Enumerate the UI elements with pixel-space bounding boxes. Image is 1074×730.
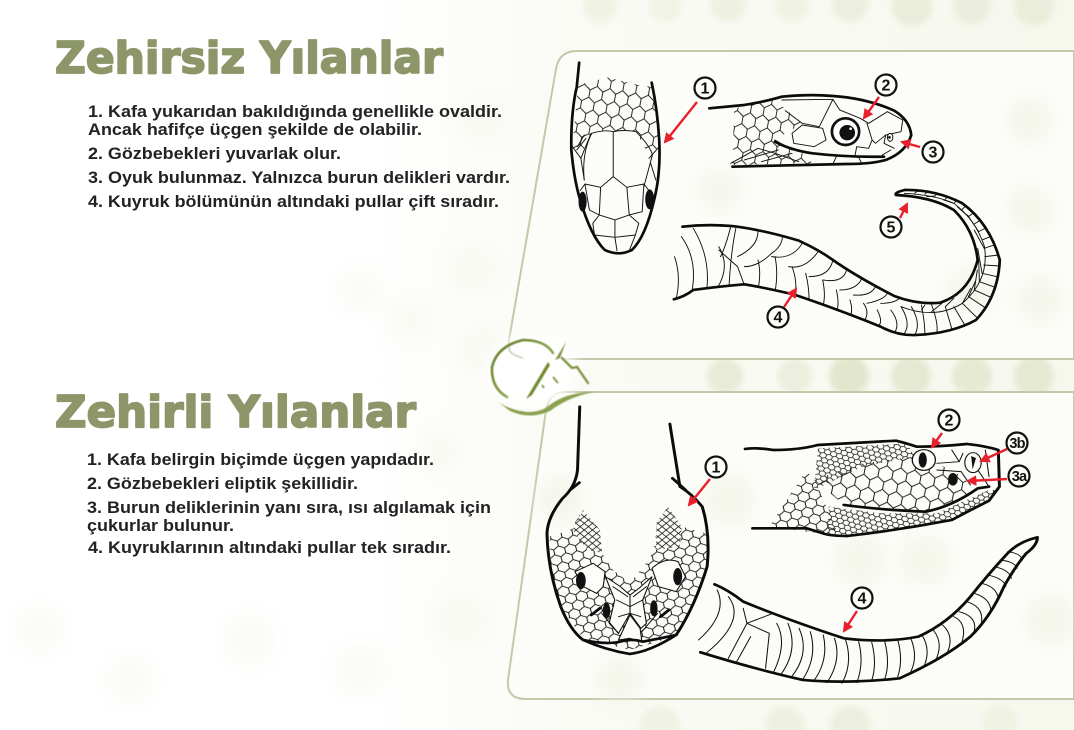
number badges: non-venomous: 3 [929, 144, 938, 162]
illustration: non-venomous tail [674, 189, 1000, 335]
number badges: venomous [706, 410, 1030, 608]
illustration: venomous head top view [547, 407, 708, 654]
title: venomous snakes: Zehirli Yılanlar [55, 387, 416, 438]
panel: non-venomous [509, 51, 1074, 359]
number badges: non-venomous: 1 [701, 80, 710, 98]
illustration: non-venomous head top view [571, 63, 660, 253]
arrows: venomous [689, 433, 1007, 631]
number badges: non-venomous: 4 [774, 310, 783, 326]
number badges: venomous: 3b [1009, 436, 1026, 452]
panel texture [536, 96, 1074, 704]
text block: non-venomous traits: 4. Kuyruk bölümünün altındaki pullar çift sıradır. [88, 192, 499, 211]
number badges: venomous: 4 [858, 590, 867, 608]
text block: venomous traits: 2. Gözbebekleri eliptik şekillidir. [87, 474, 358, 493]
logo backing glow [484, 336, 576, 408]
text block: venomous traits: çukurlar bulunur. [87, 516, 234, 535]
logo [492, 340, 595, 416]
text block: venomous traits: 4. Kuyruklarının altındaki pullar tek sıradır. [88, 538, 451, 557]
text block: non-venomous traits: 1. Kafa yukarıdan bakıldığında genellikle ovaldir. [88, 102, 502, 121]
panel: venomous [508, 392, 1074, 699]
number badges: venomous: 2 [945, 412, 954, 430]
arrows: non-venomous [665, 97, 920, 307]
text block: non-venomous traits [88, 102, 510, 211]
text block: venomous traits [87, 450, 491, 557]
number badges: non-venomous: 2 [882, 78, 891, 94]
text block: non-venomous traits: Ancak hafifçe üçgen şekilde de olabilir. [88, 120, 422, 139]
text block: non-venomous traits: 2. Gözbebekleri yuvarlak olur. [88, 144, 341, 163]
illustration: non-venomous head side view [709, 95, 911, 167]
illustration: venomous tail [699, 537, 1037, 683]
number badges: venomous: 3a [1012, 469, 1028, 485]
text block: venomous traits: 1. Kafa belirgin biçimde üçgen yapıdadır. [87, 450, 434, 469]
text block: venomous traits: 3. Burun deliklerinin yanı sıra, ısı algılamak için [87, 498, 491, 517]
title: non-venomous snakes: Zehirsiz Yılanlar [55, 33, 443, 84]
number badges: non-venomous [694, 74, 944, 328]
illustration: venomous head side view [745, 441, 999, 536]
text block: non-venomous traits: 3. Oyuk bulunmaz. Yalnızca burun delikleri vardır. [88, 168, 510, 187]
number badges: venomous: 1 [712, 460, 721, 476]
number badges: non-venomous: 5 [887, 220, 896, 236]
